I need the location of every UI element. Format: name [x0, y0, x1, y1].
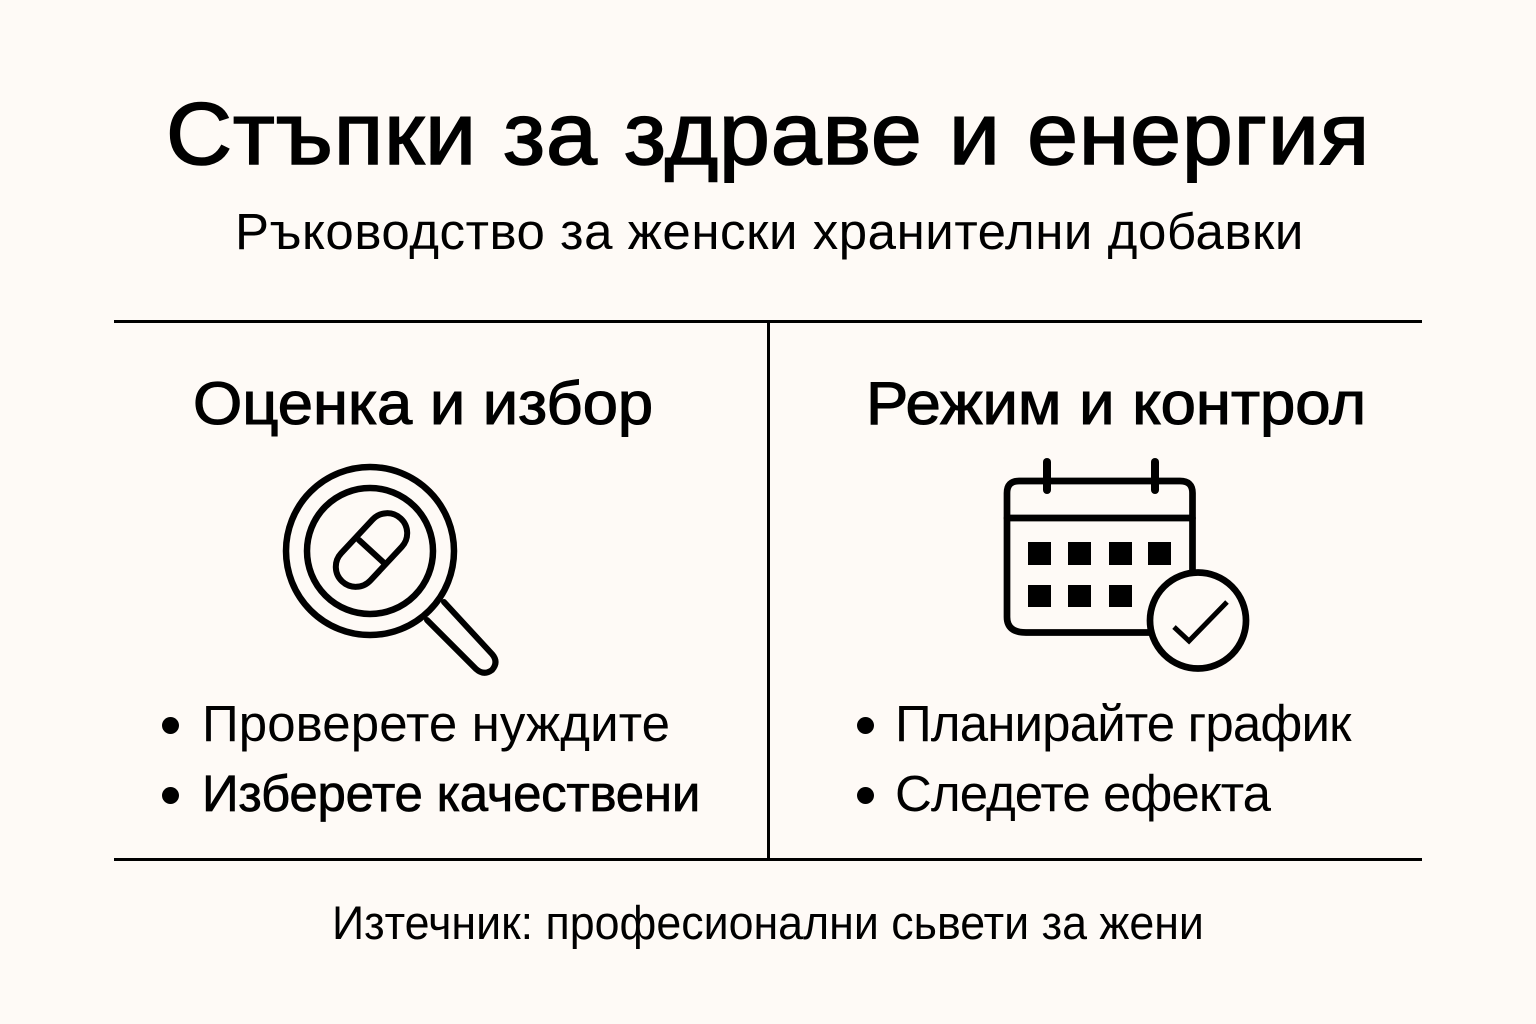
title: Стъпки за здраве и енергия — [166, 84, 1370, 183]
heading: evaluation and selection: Оценка и избор — [193, 370, 653, 437]
bullet item: check needs: Проверете нуждите — [202, 695, 670, 752]
subtitle: Ръководство за женски хранителни добавки — [235, 203, 1304, 260]
bullet item: plan schedule: Планирайте график — [895, 695, 1351, 752]
panel: evaluation and selection — [162, 370, 700, 822]
heading: regimen and monitoring: Режим и контрол — [866, 370, 1366, 437]
icon: calendar with check mark — [1004, 458, 1250, 672]
list: regimen steps — [857, 695, 1352, 822]
bullet item: track effect: Следете ефекта — [895, 765, 1270, 822]
panel: regimen and monitoring — [857, 370, 1366, 822]
bullet item: choose quality: Изберете качествени — [202, 765, 700, 822]
list: evaluation steps — [162, 695, 700, 822]
source note: Изтечник: професионални сьвети за жени — [332, 896, 1204, 949]
icon: magnifying glass with capsule — [282, 464, 499, 676]
